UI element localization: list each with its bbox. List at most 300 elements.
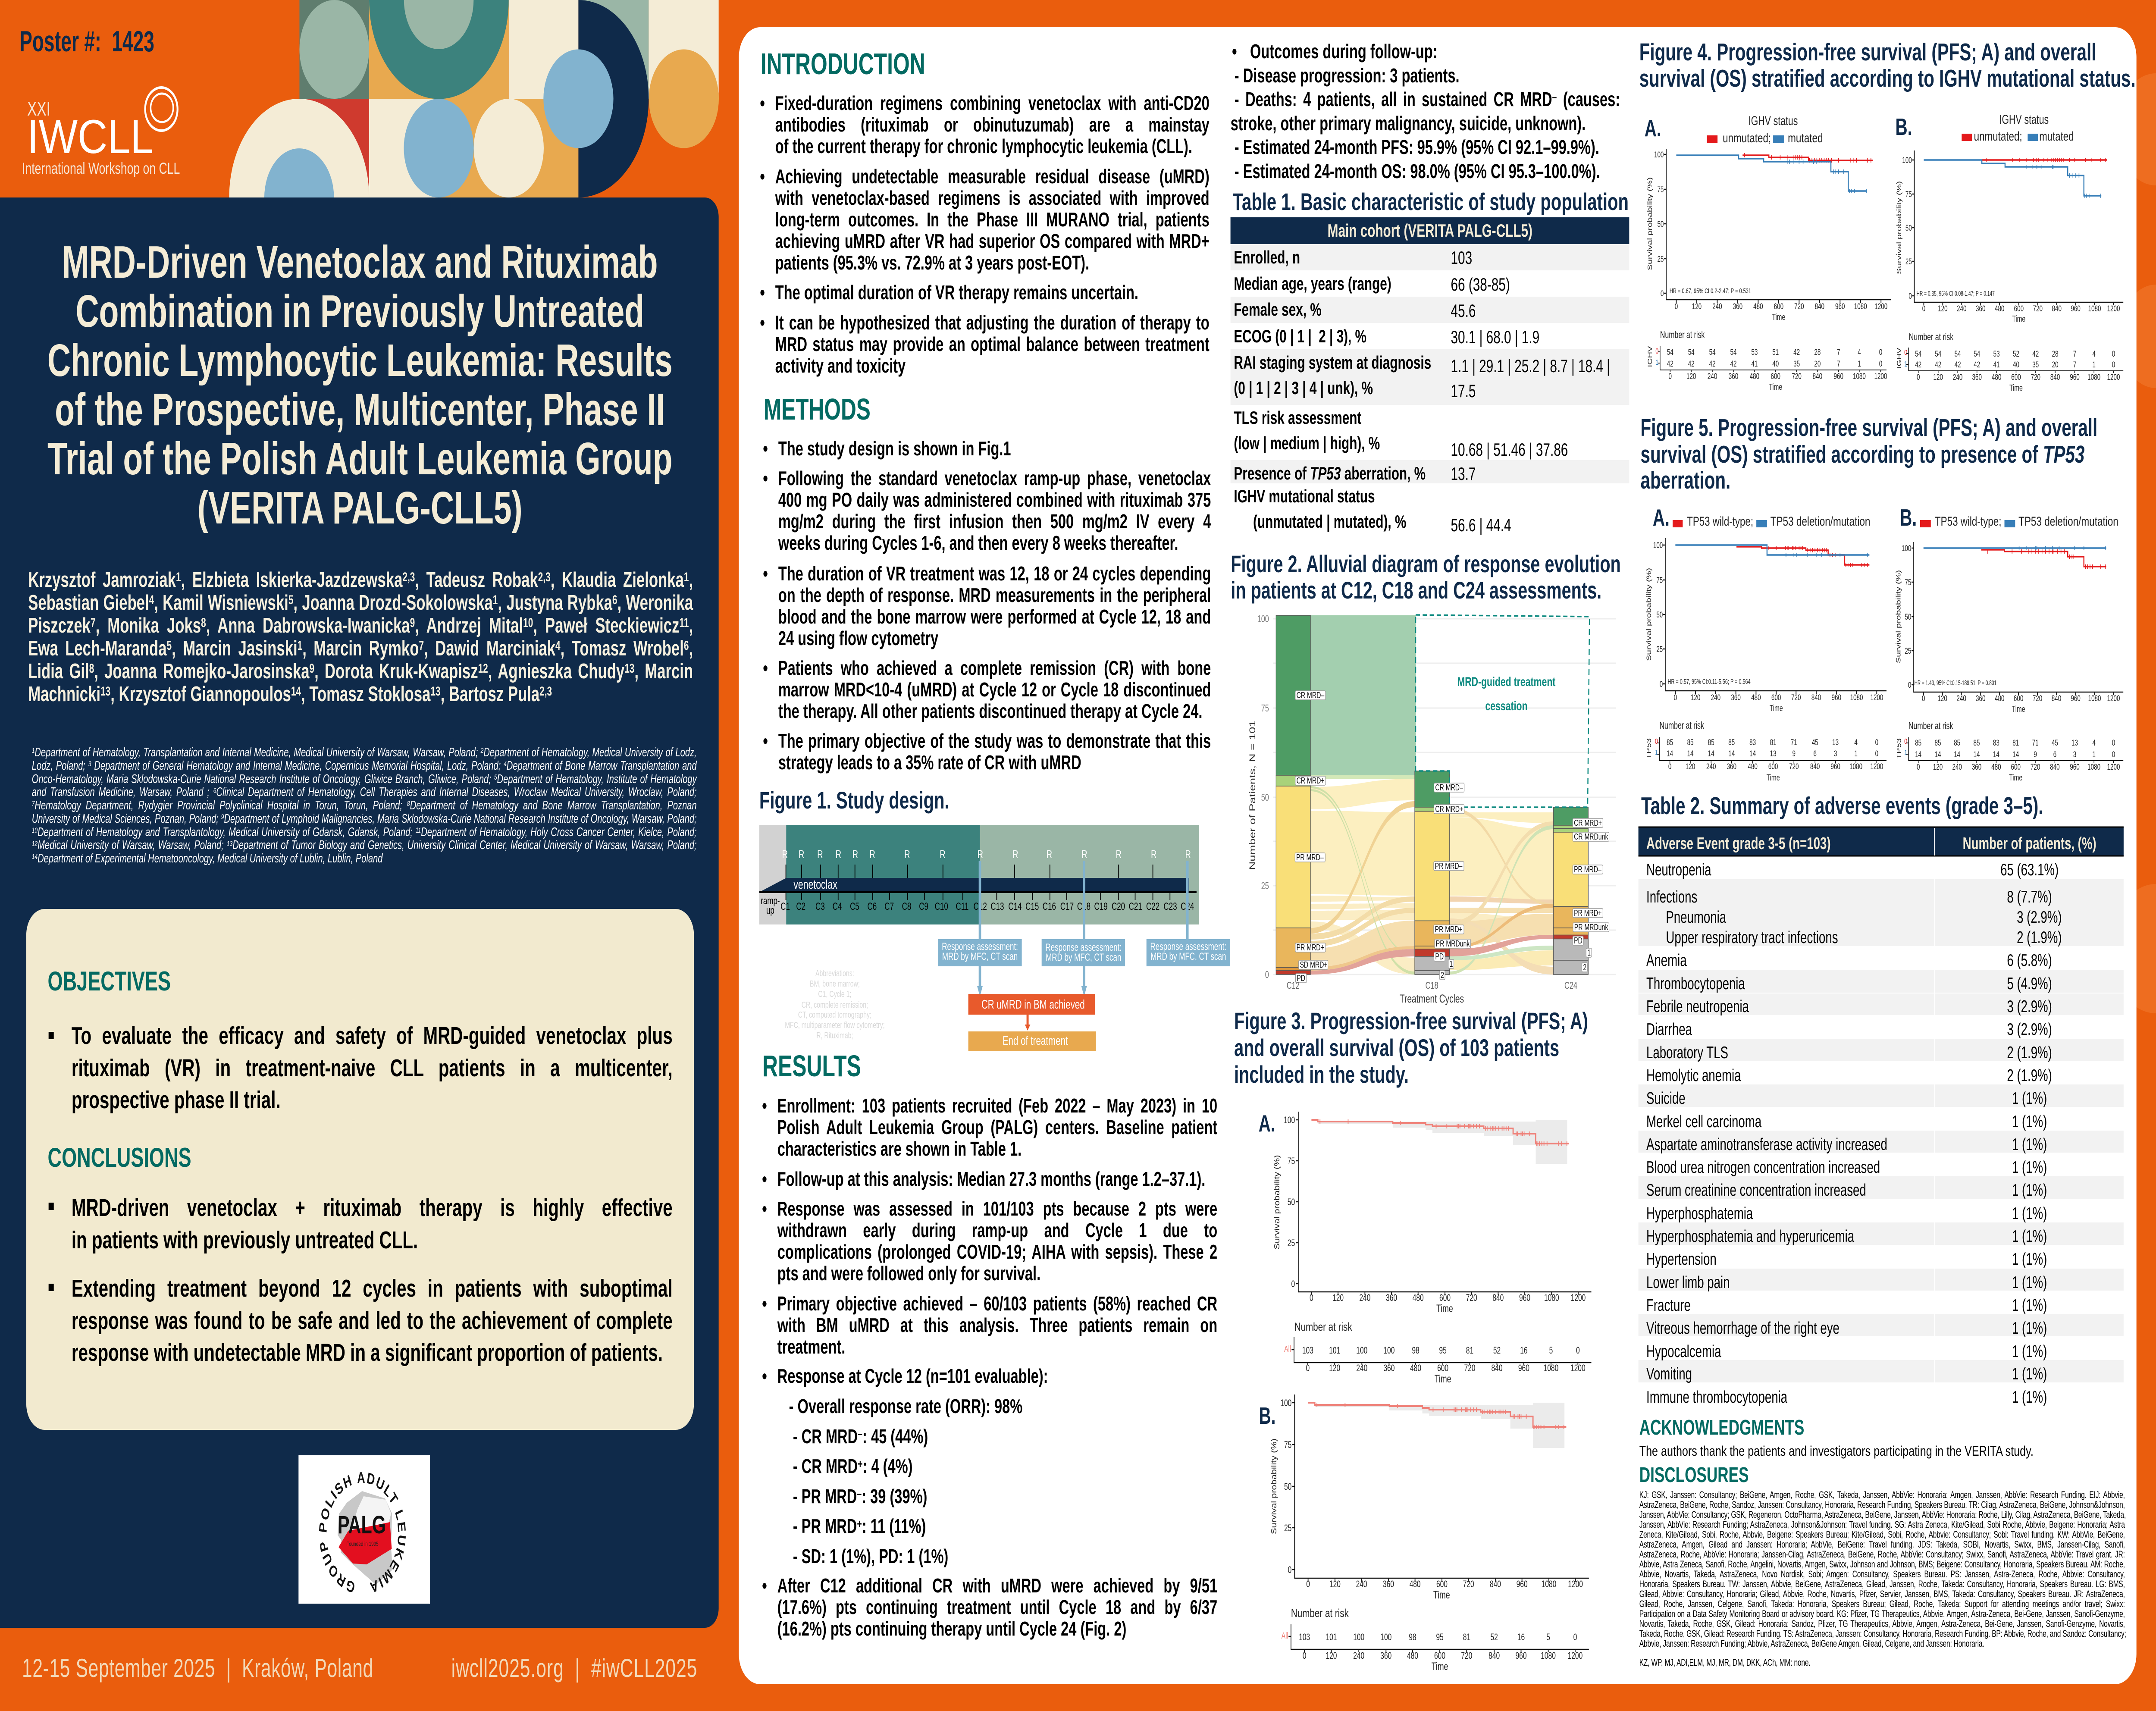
figure 5B: OS by TP53 status: 100 — [1902, 544, 1911, 553]
table 2: adverse events: 3 (2.9%) — [2007, 1020, 2052, 1039]
figure 4A: PFS by IGHV status: 4 — [1858, 348, 1861, 357]
figure 4A: PFS by IGHV status: Survival probability (%) — [1646, 177, 1653, 270]
figure 4A: PFS by IGHV status: 54 — [1730, 348, 1736, 357]
figure 4A: PFS by IGHV status: 42 — [1793, 348, 1800, 357]
figure 5A: PFS by TP53 status: 1 — [1655, 749, 1658, 757]
poster number: Poster #: 1423 — [19, 25, 154, 58]
figure 3B: OS Kaplan-Meier chart: 480 — [1407, 1651, 1418, 1661]
figure 1: study design diagram: CR uMRD in BM achieved — [981, 998, 1085, 1012]
table 2: adverse events: 2 (1.9%) — [2017, 928, 2062, 947]
figure 5B: OS by TP53 status: 0 — [1904, 737, 1907, 746]
table 2: adverse events: 8 (7.7%) — [2007, 887, 2052, 906]
figure 4A: PFS by IGHV status: 840 — [1815, 302, 1824, 311]
figure 2: alluvial diagram: 2 — [1441, 970, 1444, 980]
figure 1: study design diagram: R — [1151, 848, 1156, 861]
table 2: adverse events: 1 (1%) — [2012, 1319, 2047, 1338]
figure 1: study design diagram: C10 — [935, 901, 948, 912]
figure 2: alluvial diagram: CR MRD+ — [1574, 818, 1602, 828]
disclosures text: AstraZeneca, Roche, AbbVie: Honoraria; Janssen-Cilag, AstraZeneca, BeiGene, Roche, AbbVie: Consultancy; Swixx, Sanofi, AstraZeneca, AbbVie: Travel grant. JR: — [1639, 1549, 2125, 1560]
figure 1: study design diagram: R — [869, 848, 875, 861]
right margin decoration — [2110, 73, 2156, 1013]
figure 4A: PFS by IGHV status: 0 — [1661, 289, 1664, 298]
figure 1: study design diagram: R, Rituximab; — [816, 1031, 853, 1040]
figure 2: alluvial diagram: CR MRD– — [1297, 690, 1325, 700]
figure 4A: PFS by IGHV status: 0 — [1655, 347, 1659, 356]
figure 1: study design diagram: MRD by MFC, CT scan — [1150, 951, 1226, 962]
figure 4B: OS by IGHV status: unmutated; — [1974, 128, 2022, 144]
figure 5B: OS by TP53 status: 14 — [1935, 750, 1941, 759]
figure 5A: PFS by TP53 status: 0 — [1660, 680, 1663, 689]
figure 4B: OS by IGHV status: 0 — [1908, 292, 1912, 301]
figure 4A: PFS by IGHV status: 600 — [1771, 372, 1780, 381]
figure 5A: PFS by TP53 status: 480 — [1748, 762, 1758, 771]
figure 4B: OS by IGHV status: 720 — [2033, 304, 2043, 313]
figure 3A: PFS Kaplan-Meier chart: 81 — [1466, 1346, 1473, 1356]
objectives text: prospective phase II trial. — [72, 1086, 281, 1114]
table 2: adverse events: 1 (1%) — [2012, 1250, 2047, 1269]
footer website and hashtag: iwcll2025.org | #iwCLL2025 — [451, 1654, 697, 1683]
table 1: baseline characteristics: 17.5 — [1451, 381, 1476, 401]
figure 5B: OS by TP53 status: 50 — [1905, 613, 1911, 622]
figure 4B: OS by IGHV status: 240 — [1957, 304, 1967, 313]
authors: Machnicki13, Krzysztof Giannopoulos14, Tomasz Stoklosa13, Bartosz Pula2,3 — [28, 683, 552, 706]
figure 2: alluvial diagram: PR MRD+ — [1574, 908, 1601, 918]
figure 3B: OS Kaplan-Meier chart: 240 — [1356, 1579, 1367, 1590]
figure 4B: OS by IGHV status: 53 — [1993, 350, 2000, 359]
figure 5B: OS by TP53 status: HR = 1.43, 95% CI:0.15-189.51; P = 0.801 — [1914, 679, 1996, 686]
figure 4A: PFS by IGHV status: 960 — [1834, 372, 1843, 381]
figure 4A: PFS by IGHV status: mutated — [1788, 130, 1823, 145]
figure 4A: PFS by IGHV status: 1 — [1655, 358, 1658, 367]
figure 5A: PFS by TP53 status: 840 — [1811, 693, 1821, 702]
table 2: adverse events: 1 (1%) — [2012, 1089, 2047, 1108]
outcomes during follow-up: - Estimated 24-month OS: 98.0% (95% CI 95.3–100.0%). — [1235, 160, 1600, 182]
table 2: adverse events: 2 (1.9%) — [2007, 1066, 2052, 1085]
figure 4B: OS by IGHV status: 50 — [1905, 224, 1912, 233]
table 2: adverse events: Hypertension — [1646, 1250, 1717, 1269]
table 1: baseline characteristics: Presence of TP53 aberration, % — [1234, 463, 1426, 483]
figure 5A: PFS by TP53 status: 3 — [1834, 749, 1837, 758]
figure 4B: OS by IGHV status: 7 — [2073, 360, 2076, 370]
figure 1: study design diagram: End of treatment — [1003, 1034, 1068, 1048]
PALG logo — [298, 1455, 430, 1604]
disclosures text: Abbvie, Novartis, Takeda, AstraZeneca, Novo Nordisk, Sobi; Amgen: Consultancy, Speakers Bureau. PS: Janssen, Astra-Zeneca, Roche, Abbvie: Consultancy, — [1639, 1569, 2125, 1579]
figure 3A: PFS Kaplan-Meier chart: A. — [1259, 1111, 1275, 1137]
figure 1: study design diagram: BM, bone marrow; — [810, 979, 860, 989]
figure 3A: PFS Kaplan-Meier chart: 16 — [1520, 1346, 1528, 1356]
poster canvas: graphics, tables and charts: • — [760, 281, 765, 304]
figure 1: study design diagram: C2 — [796, 901, 805, 912]
results bullet: primary objective: with BM uMRD at this analysis. Three patients remain on — [777, 1314, 1217, 1336]
figure 2: alluvial diagram: PR MRD– — [1574, 865, 1601, 874]
figure 4B: OS by IGHV status: 0 — [1917, 373, 1920, 382]
figure 3B: OS Kaplan-Meier chart: 480 — [1410, 1579, 1421, 1590]
affiliations: 12Medical University of Warsaw, Warsaw, Poland; 13Department of Tumor Biology and Genetics, University Clinical Center, Medical University of Warsaw, Warsaw, Poland; — [32, 838, 697, 852]
figure 3A: PFS Kaplan-Meier chart: 600 — [1437, 1363, 1448, 1374]
figure 5A: PFS by TP53 status: 0 — [1875, 738, 1878, 747]
figure 4B: OS by IGHV status: 54 — [1974, 350, 1980, 359]
objectives text: rituximab (VR) in treatment-naive CLL patients in a multicenter, — [72, 1054, 673, 1081]
figure 2 title: Figure 2. Alluvial diagram of response evolution — [1231, 551, 1621, 578]
disclosures text: Novartis, Takeda, Roche, GSK, Gilead: Honoraria; Sandoz, Pfizer, TG Therapeutics, Abbvie, Amgen, Astra-Zeneca, Bei-Gene, Janssen, Sanofi-Genzyme, Novartis, — [1639, 1618, 2125, 1629]
figure 5B: OS by TP53 status: 14 — [1974, 750, 1980, 759]
figure 4A: PFS by IGHV status: 42 — [1667, 360, 1673, 369]
figure 3A: PFS Kaplan-Meier chart: 100 — [1356, 1346, 1367, 1356]
figure 5B: OS by TP53 status: 960 — [2070, 763, 2080, 772]
title: Trial of the Polish Adult Leukemia Group — [47, 433, 673, 484]
figure 3A: PFS Kaplan-Meier chart: Number at risk — [1294, 1320, 1352, 1333]
figure 5B: OS by TP53 status: 720 — [2031, 763, 2040, 772]
disclosures text: Honoraria, Speakers Bureau. TW: Janssen, Abbvie, BeiGene, AstraZeneca, Gilead, Janssen, Roche, Takeda: Consultancy, Honoraria, Speakers Bureau. LG: BMS, — [1639, 1579, 2125, 1589]
results bullet: primary objective: Primary objective achieved – 60/103 patients (58%) reached CR — [777, 1292, 1217, 1315]
figure 3A: PFS Kaplan-Meier chart: 840 — [1492, 1293, 1504, 1304]
figure 3B: OS Kaplan-Meier chart: All — [1282, 1631, 1288, 1641]
figure 5B: OS by TP53 status: 85 — [1915, 739, 1921, 748]
figure 1: study design diagram: R — [852, 848, 858, 861]
figure 5A: PFS by TP53 status: 4 — [1854, 738, 1858, 747]
figure 5B: OS by TP53 status: 600 — [2014, 694, 2023, 703]
figure 5A: PFS by TP53 status: 0 — [1655, 737, 1658, 746]
figure 4B: OS by IGHV status: 1 — [2092, 360, 2096, 370]
figure 2: alluvial diagram: 1 — [1450, 959, 1453, 969]
figure 5A: PFS by TP53 status: HR = 0.57, 95% CI:0.11-5.56; P = 0.564 — [1668, 677, 1751, 685]
title: (VERITA PALG-CLL5) — [197, 483, 523, 533]
figure 1: study design diagram: C4 — [833, 901, 842, 912]
figure 2: alluvial diagram: C18 — [1426, 980, 1438, 991]
figure 5B: OS by TP53 status: TP53 deletion/mutation — [2018, 514, 2118, 529]
methods bullet 4: Patients who achieved a complete remission (CR) with bone — [778, 657, 1211, 679]
figure 4B: OS by IGHV status: 360 — [1972, 373, 1982, 382]
figure 5 title: Figure 5. Progression-free survival (PFS; A) and overall — [1641, 414, 2097, 442]
table 1: baseline characteristics: TLS risk assessment — [1234, 407, 1361, 428]
figure 1 title: Figure 1. Study design. — [759, 787, 950, 814]
figure 4B: OS by IGHV status: 1200 — [2107, 304, 2120, 313]
figure 5B: OS by TP53 status: 14 — [2012, 750, 2019, 759]
figure 1: study design diagram: C1 — [780, 901, 790, 912]
figure 5A: PFS by TP53 status: 0 — [1875, 749, 1878, 758]
introduction bullet 2: Achieving undetectable measurable residual disease (uMRD) — [775, 165, 1210, 188]
figure 5B: OS by TP53 status: 1080 — [2088, 694, 2101, 703]
figure 5 title: survival (OS) stratified according to presence of TP53 — [1641, 441, 2084, 468]
figure 1: study design diagram: C20 — [1112, 901, 1125, 912]
figure 5A: PFS by TP53 status: 240 — [1711, 693, 1720, 702]
figure 3A: PFS Kaplan-Meier chart — [1259, 1111, 1591, 1385]
affiliations: University of Medical Sciences, Poznan, Poland; 9Department of Lymphoid Malignancies, Maria Sklodowska-Curie National Research Institute of Oncology, Warsaw, Poland; — [32, 812, 697, 826]
figure 4B: OS by IGHV status: 42 — [1974, 360, 1980, 370]
disclosures text: Takeda, Roche, GSK, Gilead: Research Funding. TS: AstraZeneca, Janssen: Consultancy, Honoraria, Research Funding. BP: Abbvie, Roche, and Sandoz: Consultancy; — [1639, 1628, 2126, 1639]
figure 5A: PFS by TP53 status: 14 — [1667, 749, 1673, 758]
figure 5A: PFS by TP53 status: Time — [1767, 773, 1780, 783]
table 2: adverse events: Thrombocytopenia — [1646, 974, 1745, 993]
figure 4A: PFS by IGHV status: 53 — [1751, 348, 1758, 357]
figure 3B: OS Kaplan-Meier chart: 360 — [1380, 1651, 1391, 1661]
figure 5A: PFS by TP53 status: 360 — [1731, 693, 1741, 702]
figure 4B: OS by IGHV status: mutated — [2039, 128, 2074, 144]
figure 3B: OS Kaplan-Meier chart: 103 — [1299, 1633, 1310, 1643]
table 2: adverse events: Pneumonia — [1666, 908, 1726, 927]
disclosures text — [1639, 1490, 2125, 1667]
poster canvas: graphics, tables and charts: • — [760, 165, 765, 188]
figure 5A: PFS by TP53 status — [1645, 505, 1887, 783]
affiliations: 10Department of Hematology and Transplantology, Medical University of Gdansk, Gdansk, Poland; 11Department of Hematology, Holy Cross Cancer Center, Kielce, Poland; — [32, 825, 697, 839]
figure 4A: PFS by IGHV status: 120 — [1686, 372, 1696, 381]
table 2: adverse events: 1 (1%) — [2012, 1364, 2047, 1383]
figure 4B: OS by IGHV status: 28 — [2052, 350, 2059, 359]
figure 4A: PFS by IGHV status: 1080 — [1854, 302, 1867, 311]
figure 3B: OS Kaplan-Meier chart: 50 — [1284, 1482, 1291, 1492]
figure 5A: PFS by TP53 status: 840 — [1810, 762, 1820, 771]
figure 4A: PFS by IGHV status: 51 — [1772, 348, 1779, 357]
figure 4A: PFS by IGHV status: 20 — [1814, 360, 1821, 369]
figure 3B: OS Kaplan-Meier chart: 840 — [1489, 1651, 1500, 1661]
disclosures text: Participation on a Data Safety Monitoring Board or advisory board. KG: Pfizer, TG Therapeutics, Abbvie, Amgen, Astra-Zeneca, Bei-Gene, Janssen, Sanofi-Genzyme, — [1639, 1608, 2125, 1619]
figure 4B: OS by IGHV status: 1 — [1904, 360, 1907, 369]
figure 1: study design diagram: R — [1185, 848, 1191, 861]
figure 2: alluvial diagram: C12 — [1287, 980, 1300, 991]
iwCLL logo: International Workshop on CLL — [22, 160, 180, 177]
table 2 title: Table 2. Summary of adverse events (grade 3–5). — [1641, 792, 2043, 820]
acknowledgments heading: ACKNOWLEDGMENTS — [1639, 1416, 1804, 1439]
figure 4B: OS by IGHV status: 0 — [1904, 348, 1907, 357]
figure 4B: OS by IGHV status: 840 — [2050, 373, 2060, 382]
disclosures text: AstraZeneca, BeiGene, Roche, Sandoz, Janssen: Consultancy, Honoraria, Research Funding, Speakers Bureau. TR: Cilag, AstraZeneca, BeiGene, Johnson&Johnson, — [1639, 1499, 2125, 1510]
figure 5A: PFS by TP53 status: 50 — [1656, 611, 1663, 620]
figure 5B: OS by TP53 status: 720 — [2033, 694, 2042, 703]
figure 4B: OS by IGHV status: IGHV — [1896, 348, 1902, 369]
figure 4B: OS by IGHV status: 1080 — [2088, 304, 2101, 313]
figure 5B: OS by TP53 status: 25 — [1905, 647, 1911, 656]
decorative header pattern — [229, 0, 719, 197]
affiliations: 14Department of Experimental Hematooncology, Medical University of Lublin, Lublin, Poland — [32, 852, 382, 865]
figure 3B: OS Kaplan-Meier chart: 600 — [1434, 1651, 1445, 1661]
figure 3A: PFS Kaplan-Meier chart: 360 — [1386, 1293, 1397, 1304]
figure 3A: PFS Kaplan-Meier chart: 720 — [1464, 1363, 1475, 1374]
figure 1: study design diagram: C22 — [1146, 901, 1159, 912]
results bullet: response at cycle 12: Response at Cycle 12 (n=101 evaluable): — [777, 1365, 1048, 1387]
figure 1: study design diagram: Response assessment: — [1045, 942, 1122, 953]
figure 5B: OS by TP53 status: Number at risk — [1908, 721, 1953, 732]
figure 5B: OS by TP53 status: 1200 — [2107, 763, 2120, 772]
figure 1: study design diagram: C5 — [850, 901, 859, 912]
figure 5A: PFS by TP53 status: 100 — [1653, 541, 1663, 550]
results heading: RESULTS — [762, 1049, 861, 1083]
table 1: baseline characteristics: 45.6 — [1451, 301, 1476, 321]
figure 5A: PFS by TP53 status: 13 — [1832, 738, 1839, 747]
table 2: adverse events: Number of patients, (%) — [1963, 834, 2096, 853]
figure 4B: OS by IGHV status: 42 — [1955, 360, 1961, 370]
figure 3A: PFS Kaplan-Meier chart: 120 — [1329, 1363, 1340, 1374]
figure 5A: PFS by TP53 status: 120 — [1691, 693, 1700, 702]
figure 2: alluvial diagram: cessation — [1485, 698, 1527, 713]
figure 3 title: included in the study. — [1234, 1061, 1409, 1088]
figure 1: study design diagram: ramp- — [761, 895, 780, 907]
results bullet: after C12: (16.2%) pts continuing therapy until Cycle 24 (Fig. 2) — [777, 1617, 1126, 1640]
figure 3B: OS Kaplan-Meier chart: B. — [1259, 1403, 1275, 1429]
table 2: adverse events: 6 (5.8%) — [2007, 951, 2052, 970]
figure 1: study design diagram: C11 — [956, 901, 968, 912]
figure 4B: OS by IGHV status: 20 — [2052, 360, 2059, 370]
figure 3B: OS Kaplan-Meier chart: 95 — [1436, 1633, 1444, 1643]
figure 4A: PFS by IGHV status: 480 — [1753, 302, 1763, 311]
figure 3B: OS Kaplan-Meier chart: 25 — [1284, 1523, 1291, 1534]
figure 1: study design diagram: C16 — [1043, 901, 1056, 912]
figure 3B: OS Kaplan-Meier chart: 52 — [1490, 1633, 1498, 1643]
figure 3B: OS Kaplan-Meier chart: 120 — [1326, 1651, 1337, 1661]
figure 3B: OS Kaplan-Meier chart: 100 — [1280, 1398, 1291, 1409]
figure 3B: OS Kaplan-Meier chart: 0 — [1306, 1579, 1310, 1590]
figure 5A: PFS by TP53 status: TP53 — [1645, 738, 1652, 759]
figure 5B: OS by TP53 status: 0 — [1908, 681, 1911, 690]
figure 5A: PFS by TP53 status: 13 — [1770, 749, 1777, 758]
figure 3A: PFS Kaplan-Meier chart: 0 — [1310, 1293, 1313, 1304]
response rate sub-list: - PR MRD+: 11 (11%) — [793, 1515, 926, 1537]
poster canvas: graphics, tables and charts: • — [762, 1197, 767, 1220]
figure 2: alluvial diagram: 25 — [1261, 881, 1269, 892]
conclusion one — [72, 1192, 673, 1256]
figure 2: alluvial diagram: 2 — [1583, 962, 1586, 972]
methods bullet 4: the therapy. All other patients discontinued therapy at Cycle 24. — [778, 700, 1202, 722]
figure 5B: OS by TP53 status: 71 — [2032, 739, 2039, 748]
figure 3B: OS Kaplan-Meier chart: 98 — [1409, 1633, 1416, 1643]
poster canvas: graphics, tables and charts: • — [762, 1292, 767, 1315]
figure 2: alluvial diagram: SD MRD+ — [1300, 960, 1328, 970]
figure 4A: PFS by IGHV status: Time — [1772, 312, 1785, 322]
figure 5B: OS by TP53 status: 120 — [1933, 763, 1943, 772]
figure 5B: OS by TP53 status — [1895, 505, 2123, 783]
figure 5A: PFS by TP53 status: 85 — [1687, 738, 1694, 747]
figure 2: alluvial diagram: C24 — [1564, 980, 1577, 991]
figure 3B: OS Kaplan-Meier chart: 5 — [1546, 1633, 1550, 1643]
figure 4A: PFS by IGHV status: 840 — [1813, 372, 1822, 381]
white main panel — [739, 27, 2137, 1684]
figure 1: study design diagram: up — [766, 905, 774, 916]
objectives text: To evaluate the efficacy and safety of MRD-guided venetoclax plus — [72, 1022, 673, 1050]
figure 1: study design diagram: MRD by MFC, CT scan — [1046, 952, 1121, 963]
figure 5B: OS by TP53 status: 14 — [1954, 750, 1960, 759]
figure 4A: PFS by IGHV status: IGHV — [1646, 346, 1653, 367]
figure 4 title: survival (OS) stratified according to IGHV mutational status. — [1639, 65, 2136, 92]
conclusion two: response was found to be safe and led to the achievement of complete — [72, 1307, 673, 1334]
affiliations: Onco-Hematology, Maria Sklodowska-Curie National Research Institute of Oncology, Gliwice Branch, Gliwice, Poland; 5Department of Hematology, Institute of Hematology — [32, 772, 697, 786]
figure 4B: OS by IGHV status: 0 — [2112, 350, 2115, 359]
poster canvas: graphics, tables and charts: • — [762, 1168, 767, 1190]
figure 5B: OS by TP53 status: 85 — [1935, 739, 1941, 748]
figure 5A: PFS by TP53 status: TP53 wild-type; — [1687, 514, 1753, 529]
figure 1: study design diagram: CT, computed tomography; — [798, 1010, 871, 1020]
figure 5A: PFS by TP53 status: 9 — [1792, 749, 1796, 758]
table 2: adverse events — [1639, 827, 2124, 1407]
figure 3A: PFS Kaplan-Meier chart: 75 — [1288, 1156, 1295, 1167]
figure 2: alluvial diagram: 75 — [1261, 703, 1269, 714]
table 2: adverse events: Anemia — [1646, 951, 1687, 970]
table 1: baseline characteristics: (unmutated | mutated), % — [1253, 511, 1406, 532]
figure 4A: PFS by IGHV status: Number at risk — [1660, 329, 1705, 341]
figure 3A: PFS Kaplan-Meier chart: 480 — [1413, 1293, 1424, 1304]
figure 5A: PFS by TP53 status: 14 — [1687, 749, 1694, 758]
figure 4A: PFS by IGHV status: 240 — [1712, 302, 1722, 311]
figure 4B: OS by IGHV status: 25 — [1905, 257, 1912, 266]
table 1: baseline characteristics: RAI staging system at diagnosis — [1234, 352, 1431, 373]
figure 5B: OS by TP53 status: 360 — [1976, 694, 1985, 703]
figure 5A: PFS by TP53 status: 600 — [1768, 762, 1778, 771]
table 1 title: Table 1. Basic characteristic of study population — [1233, 188, 1629, 216]
table 2: adverse events: Hemolytic anemia — [1646, 1066, 1741, 1085]
figure 5B: OS by TP53 status: TP53 — [1895, 738, 1902, 759]
figure 5A: PFS by TP53 status: 14 — [1708, 749, 1714, 758]
table 2: adverse events: 3 (2.9%) — [2017, 908, 2062, 927]
figure 1: study design diagram: R — [978, 848, 983, 861]
poster canvas: graphics, tables and charts: • — [763, 467, 768, 489]
affiliations: Lodz, Poland; 3 Department of General Hematology and Internal Medicine, Copernicus Memorial Hospital, Lodz, Poland; 4Department of Bone Marrow Transplantation and — [32, 759, 697, 773]
figure 3B: OS Kaplan-Meier chart: Survival probability (%) — [1269, 1438, 1278, 1534]
figure 3A: PFS Kaplan-Meier chart: 840 — [1492, 1363, 1503, 1374]
figure 4B: OS by IGHV status: 840 — [2052, 304, 2062, 313]
introduction bullet 1: of the current therapy for chronic lymphocytic leukemia (CLL). — [775, 135, 1192, 157]
figure 3A: PFS Kaplan-Meier chart: 103 — [1302, 1346, 1313, 1356]
figure 4A: PFS by IGHV status: 7 — [1837, 348, 1840, 357]
figure 1: study design diagram: C19 — [1094, 901, 1108, 912]
methods bullet 2: weeks during Cycles 1-6, and then every 8 weeks thereafter. — [778, 532, 1178, 554]
figure 3A: PFS Kaplan-Meier chart: Time — [1435, 1373, 1451, 1385]
figure 4B: OS by IGHV status: 720 — [2031, 373, 2040, 382]
figure 4A: PFS by IGHV status: 720 — [1794, 302, 1804, 311]
poster canvas: graphics, tables and charts: • — [760, 92, 765, 114]
figure 5B: OS by TP53 status: 83 — [1993, 739, 1999, 748]
figure 3A: PFS Kaplan-Meier chart: 52 — [1493, 1346, 1501, 1356]
table 1: baseline characteristics: Female sex, % — [1234, 299, 1322, 320]
outcomes during follow-up: - Deaths: 4 patients, all in sustained CR MRD– (causes: — [1235, 88, 1620, 110]
figure 5B: OS by TP53 status: 1 — [1904, 749, 1907, 757]
figure 5A: PFS by TP53 status: 360 — [1727, 762, 1736, 771]
results bullet: after C12: After C12 additional CR with uMRD were achieved by 9/51 — [777, 1574, 1217, 1597]
figure 1: study design diagram: C18 — [1077, 901, 1091, 912]
methods bullet 3 — [778, 563, 1211, 649]
authors: Krzysztof Jamroziak1, Elzbieta Iskierka-Jazdzewska2,3, Tadeusz Robak2,3, Klaudia Zielonka1, — [28, 568, 693, 592]
title: MRD-Driven Venetoclax and Rituximab — [62, 237, 658, 288]
figure 5B: OS by TP53 status: 0 — [2112, 739, 2115, 748]
response rate sub-list — [789, 1391, 1186, 1571]
figure 3A: PFS Kaplan-Meier chart: 1200 — [1570, 1363, 1586, 1374]
conclusion one: in patients with previously untreated CLL. — [72, 1226, 418, 1254]
table 1: baseline characteristics: 56.6 | 44.4 — [1451, 515, 1511, 535]
table 2: adverse events: 1 (1%) — [2012, 1227, 2047, 1246]
figure 5B: OS by TP53 status: 960 — [2071, 694, 2081, 703]
results bullet: response assessment: withdrawn early during ramp-up and Cycle 1 due to — [777, 1219, 1217, 1241]
figure 3B: OS Kaplan-Meier chart: 101 — [1326, 1633, 1337, 1643]
conclusion one: MRD-driven venetoclax + rituximab therapy is highly effective — [72, 1194, 673, 1222]
title: of the Prospective, Multicenter, Phase II — [55, 384, 665, 435]
table 1: baseline characteristics: (0 | 1 | 2 | 3 | 4 | unk), % — [1234, 378, 1373, 398]
table 2: adverse events: Aspartate aminotransferase activity increased — [1646, 1135, 1887, 1154]
figure 1: study design diagram: venetoclax — [793, 877, 837, 892]
figure 3A: PFS Kaplan-Meier chart: 1080 — [1544, 1293, 1559, 1304]
table 2: adverse events: Diarrhea — [1646, 1020, 1692, 1039]
figure 5B: OS by TP53 status: TP53 wild-type; — [1935, 514, 2001, 529]
figure 4A: PFS by IGHV status: 50 — [1657, 220, 1664, 229]
figure 4A: PFS by IGHV status: 35 — [1793, 360, 1800, 369]
table 2: adverse events: Hyperphosphatemia and hyperuricemia — [1646, 1227, 1854, 1246]
figure 4A: PFS by IGHV status: 42 — [1688, 360, 1695, 369]
figure 4B: OS by IGHV status: 52 — [2013, 350, 2019, 359]
figure 4B: OS by IGHV status: 120 — [1934, 373, 1943, 382]
figure 2: alluvial diagram: PD — [1574, 936, 1583, 946]
methods heading: METHODS — [764, 392, 871, 426]
table 2: adverse events: Hypocalcemia — [1646, 1342, 1721, 1361]
disclosures text: KJ: GSK, Janssen: Consultancy; BeiGene, Amgen, Roche, GSK, Takeda, Janssen, AbbVie: Honoraria; Amgen, Janssen, AbbVie: Research Funding. EIJ: Abbvie, — [1639, 1489, 2125, 1500]
figure 3A: PFS Kaplan-Meier chart: 100 — [1383, 1346, 1395, 1356]
figure 5A: PFS by TP53 status: 960 — [1832, 693, 1841, 702]
figure 4A: PFS by IGHV status: 54 — [1667, 348, 1673, 357]
